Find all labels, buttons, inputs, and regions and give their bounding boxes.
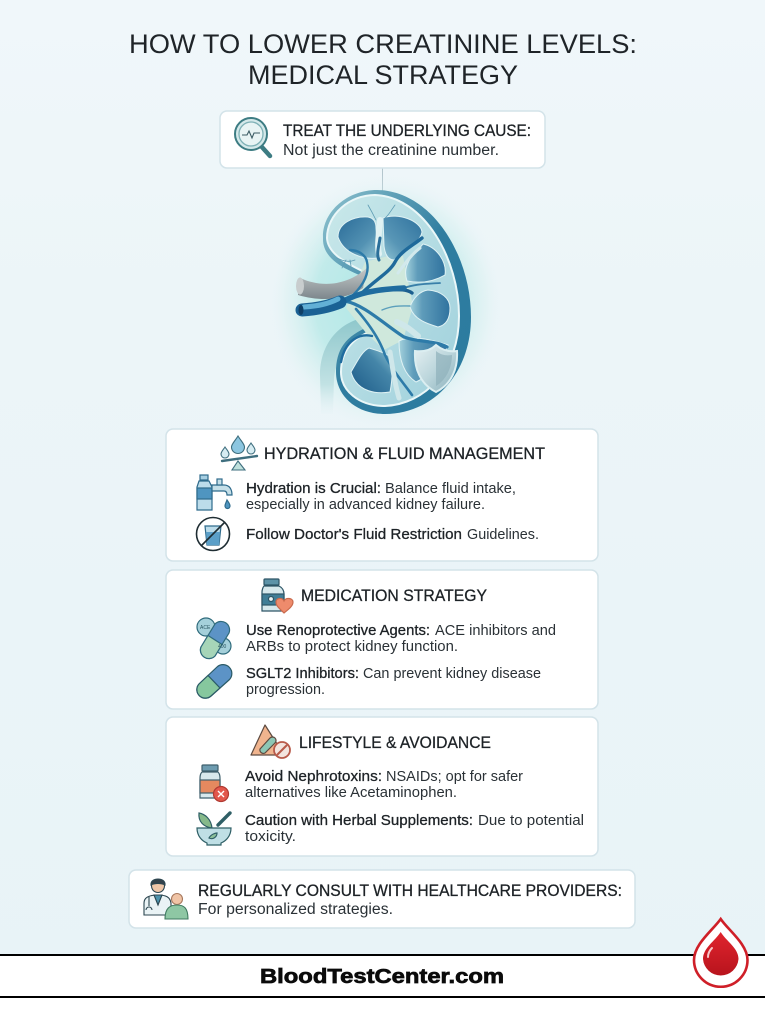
panel: hydration and fluid management <box>166 429 598 561</box>
ureter <box>320 316 372 414</box>
text: avoid nephrotoxins: alternatives like Acetaminophen. <box>245 784 457 801</box>
vein and branches <box>302 205 447 398</box>
heading: LIFESTYLE & AVOIDANCE <box>299 733 491 752</box>
icon: pill bottle with cross <box>200 765 228 802</box>
icon: SGLT2 capsule <box>197 665 232 698</box>
medullary lobes <box>338 216 450 393</box>
shield <box>415 345 457 392</box>
icon: warning triangle with pill <box>251 725 290 758</box>
text: renoprotective agents <box>246 622 556 655</box>
heading: HYDRATION & FLUID MANAGEMENT <box>264 444 545 463</box>
text: renoprotective agents: Use Renoprotective Agents: <box>246 622 430 639</box>
icon: blood drop logo <box>694 919 748 987</box>
title: HOW TO LOWER CREATININE LEVELS: <box>129 29 637 59</box>
text: SGLT2 inhibitors: SGLT2 Inhibitors: <box>246 665 359 682</box>
connector line <box>382 168 384 191</box>
kidney cortex <box>327 195 459 406</box>
text: avoid nephrotoxins: NSAIDs; opt for safer <box>386 768 523 785</box>
icon: ACE and ARB pills <box>197 618 231 659</box>
text: avoid nephrotoxins: Avoid Nephrotoxins: <box>245 768 382 785</box>
text: SGLT2 inhibitors: progression. <box>246 681 325 698</box>
icon: ACE and ARB pills: ACE <box>200 625 211 631</box>
footer <box>0 954 765 1024</box>
kidney outer <box>323 190 471 414</box>
text: renoprotective agents: ARBs to protect kidney function. <box>246 638 458 655</box>
panel: lifestyle and avoidance <box>166 717 598 856</box>
text: herbal supplements: Caution with Herbal Supplements: <box>245 812 473 829</box>
callout text <box>198 882 622 918</box>
kidney illustration <box>268 174 504 430</box>
text: hydration is crucial: Balance fluid intake, <box>385 480 516 497</box>
text: follow fluid restriction: Follow Doctor's Fluid Restriction <box>246 526 462 543</box>
icon: pill bottle with heart <box>262 579 293 613</box>
icon: water drops on a balance <box>221 436 257 470</box>
title: MEDICAL STRATEGY <box>248 60 518 90</box>
text: SGLT2 inhibitors <box>246 665 541 698</box>
text: SGLT2 inhibitors: Can prevent kidney disease <box>363 665 541 682</box>
callout text: REGULARLY CONSULT WITH HEALTHCARE PROVIDERS: <box>198 882 622 900</box>
text: hydration is crucial: Hydration is Crucial: <box>246 480 381 497</box>
footer brand: BloodTestCenter.com <box>260 966 504 988</box>
text: herbal supplements: Due to potential <box>478 812 584 829</box>
panel: medication strategy <box>166 570 598 709</box>
callout text: For personalized strategies. <box>198 901 393 918</box>
callout text <box>283 122 531 159</box>
icon: bottle and tap <box>197 475 232 510</box>
icon: ACE and ARB pills: 400 <box>218 644 227 650</box>
heading: MEDICATION STRATEGY <box>301 586 487 605</box>
panel: consult healthcare providers <box>129 870 635 928</box>
callout text: TREAT THE UNDERLYING CAUSE: <box>283 122 531 140</box>
text: follow fluid restriction: Guidelines. <box>467 526 539 543</box>
icon: doctor and patient <box>144 879 188 919</box>
icon: mortar, pestle and herb <box>197 813 231 845</box>
text: hydration is crucial: especially in advanced kidney failure. <box>246 496 485 513</box>
text: herbal supplements <box>245 812 584 845</box>
medulla centre <box>346 256 413 350</box>
icon: restricted glass <box>196 518 230 550</box>
panel: treat the underlying cause <box>220 111 545 168</box>
text: renoprotective agents: ACE inhibitors and <box>435 622 556 639</box>
icon: magnifying glass with pulse <box>235 118 270 156</box>
callout text: Not just the creatinine number. <box>283 142 499 159</box>
text: hydration is crucial <box>246 480 516 513</box>
title <box>129 29 637 90</box>
text: avoid nephrotoxins <box>245 768 523 801</box>
artery <box>298 268 367 299</box>
text: herbal supplements: toxicity. <box>245 828 296 845</box>
